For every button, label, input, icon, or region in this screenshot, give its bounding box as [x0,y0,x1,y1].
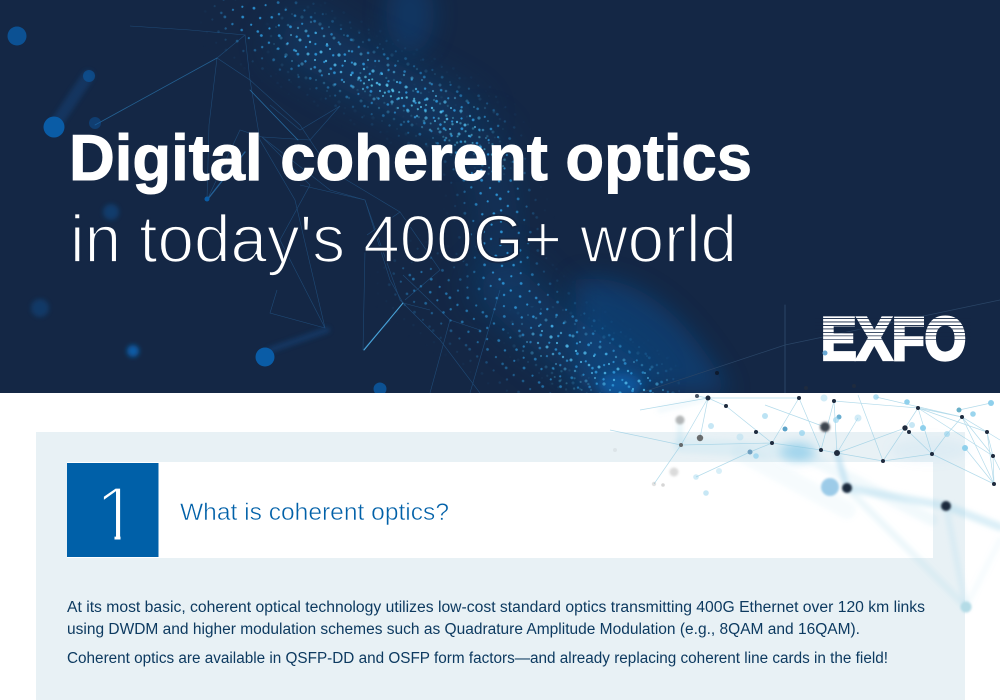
thin links [610,395,1000,484]
title line 1: Digital coherent optics [69,121,752,194]
panel: what is coherent optics [36,432,965,700]
dark nodes [695,350,996,511]
number badge [67,463,158,558]
network lines in header [130,26,500,393]
section heading: What is coherent optics? [180,499,449,526]
body text: Coherent optics are available in QSFP-DD and OSFP form factors—and already replacing coherent line cards in the field! [67,650,888,667]
particle wave [200,0,680,393]
panel: hero header [0,0,1000,397]
light blue nodes [693,394,994,612]
blurred blobs [780,438,970,462]
soft beams [660,398,1000,607]
number badge: 1 [95,470,138,558]
grey faded nodes [613,416,703,487]
body text: using DWDM and higher modulation schemes such as Quadrature Amplitude Modulation (e.g., 8QAM and 16QAM). [67,621,860,638]
body text [67,599,925,667]
network graphic [610,350,1000,612]
title line 2: in today's 400G+ world [70,202,737,277]
title [69,121,752,277]
glowing nodes [8,26,386,396]
blue cloud glow [285,0,730,397]
heading bar [67,462,933,558]
body text: At its most basic, coherent optical technology utilizes low-cost standard optics transmitting 400G Ethernet over 120 km links [67,599,925,616]
logo: EXFO: EXFO [821,306,966,372]
